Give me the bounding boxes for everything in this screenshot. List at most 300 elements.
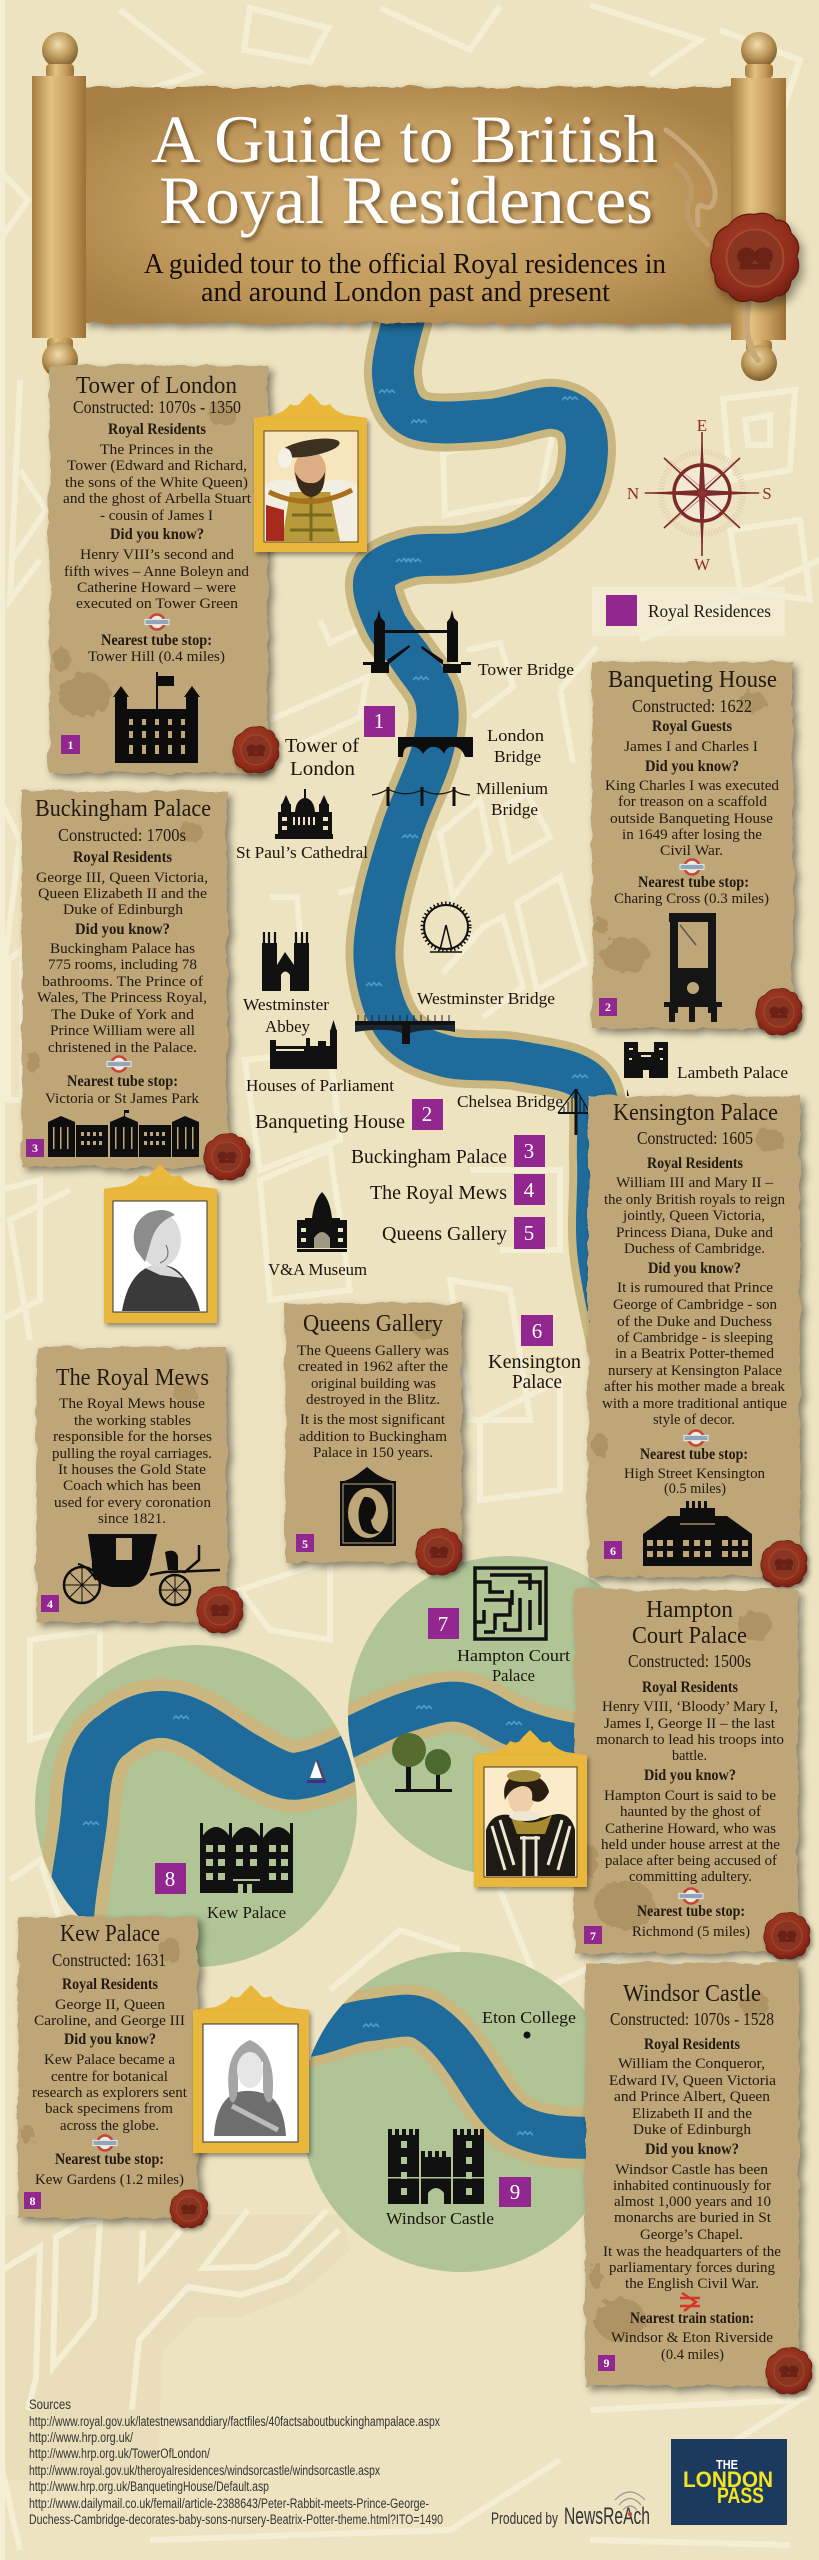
train station: Windsor & Eton Riverside: [611, 2330, 773, 2346]
did you know text: [37, 921, 207, 1056]
sources: http://www.hrp.org.uk/: [29, 2430, 133, 2445]
portrait: tudor queen: [473, 1730, 587, 1887]
stains: [592, 691, 766, 973]
royal residents text: and Prince Albert, Queen: [614, 2089, 771, 2105]
number tag: 9: [604, 2356, 610, 2370]
royal residents text: Edward IV, Queen Victoria: [609, 2073, 776, 2089]
map number tags: 9: [510, 2180, 520, 2204]
did you know text: Buckingham Palace has: [50, 941, 195, 957]
royal residents text: [63, 421, 252, 524]
body text: addition to Buckingham: [299, 1429, 447, 1445]
map labels: Chelsea Bridge: [457, 1092, 563, 1111]
royal residents text: [36, 849, 208, 918]
icon: national rail: [680, 2293, 700, 2311]
construction date: Constructed: 1070s - 1528: [610, 2009, 774, 2029]
tube stop: [632, 1903, 750, 1940]
did you know text: Civil War.: [660, 843, 723, 859]
portrait: henry viii: [253, 393, 367, 552]
royal residents text: and the ghost of Arbella Stuart: [63, 491, 252, 507]
map number tags: 8: [165, 1867, 175, 1891]
tube stop: (0.5 miles): [664, 1481, 726, 1497]
body text: the working stables: [74, 1413, 191, 1429]
heading: Hampton: [646, 1597, 733, 1623]
body text: pulling the royal carriages.: [52, 1446, 212, 1462]
did you know text: palace after being accused of: [605, 1853, 777, 1869]
did you know text: research as explorers sent: [32, 2085, 188, 2101]
stains: [53, 402, 236, 717]
body text: The Royal Mews house: [59, 1396, 205, 1412]
panel: kensington palace: [588, 1096, 807, 1587]
did you know text: executed on Tower Green: [76, 596, 239, 612]
number tag: 5: [302, 1537, 308, 1551]
logo: the london pass: LONDON: [683, 2467, 773, 2492]
map labels: Kensington: [488, 1351, 581, 1373]
compass: S: [762, 484, 772, 503]
map labels: London: [290, 758, 355, 780]
did you know text: christened in the Palace.: [48, 1040, 197, 1056]
body text: destroyed in the Blitz.: [306, 1392, 440, 1408]
did you know text: Catherine Howard – were: [77, 580, 236, 596]
panel: buckingham palace: [22, 791, 250, 1180]
map number tags: 2: [422, 1102, 432, 1126]
did you know text: Did you know?: [75, 921, 170, 938]
number tag: 1: [68, 738, 74, 752]
did you know text: Did you know?: [645, 758, 739, 775]
heading: Kew Palace: [60, 1921, 160, 1947]
tube stop: Victoria or St James Park: [45, 1091, 200, 1107]
legend: Royal Residences: [648, 601, 771, 621]
heading: Banqueting House: [608, 667, 777, 693]
did you know text: in a Beatrix Potter-themed: [615, 1346, 774, 1362]
wax seal: [761, 1540, 807, 1587]
wax seal: [204, 1133, 250, 1180]
map labels: Eton College: [482, 2008, 576, 2027]
icon: lambeth palace: [624, 1042, 668, 1096]
panel: hampton court palace: [575, 1590, 810, 1959]
tube stop: Nearest tube stop:: [638, 874, 749, 891]
tube stop: Kew Gardens (1.2 miles): [35, 2172, 184, 2188]
number tag: [584, 1926, 602, 1944]
panel: banqueting house: [592, 662, 802, 1035]
sources: Duchess-Cambridge-decorates-baby-sons-nursery-Beatrix-Potter-theme.html?ITO=1490: [29, 2512, 443, 2527]
body text: used for every coronation: [54, 1495, 211, 1511]
body text: Coach which has been: [63, 1478, 202, 1494]
did you know text: committing adultery.: [629, 1869, 752, 1885]
map labels: Abbey: [265, 1017, 310, 1036]
icon: houses of parliament: [270, 1020, 337, 1069]
royal residents text: the only British royals to reign: [604, 1192, 785, 1208]
number tag: [26, 1139, 44, 1157]
icon: tube roundel: [679, 1888, 703, 1904]
construction date: Constructed: 1070s - 1350: [73, 397, 241, 417]
map number tags: 1: [374, 709, 384, 733]
icon: westminster bridge: [355, 1015, 455, 1044]
royal residents text: jointly, Queen Victoria,: [622, 1208, 765, 1224]
compass: N: [627, 484, 639, 503]
map labels: London: [487, 726, 545, 745]
tube stop: High Street Kensington: [624, 1466, 765, 1482]
wax seal: [756, 988, 802, 1035]
number tag: [61, 735, 80, 754]
heading: The Royal Mews: [56, 1365, 209, 1391]
body text: since 1821.: [98, 1511, 166, 1527]
did you know text: centre for botanical: [51, 2069, 168, 2085]
panel background: [22, 791, 227, 1167]
did you know text: Catherine Howard, who was: [605, 1821, 776, 1837]
number tag: 4: [47, 1597, 53, 1611]
panel background: [592, 662, 793, 1028]
icon: kensington palace: [643, 1501, 752, 1566]
did you know text: for treason on a scaffold: [618, 794, 767, 810]
royal residents text: Caroline, and George III: [34, 2013, 185, 2029]
royal residents text: the sons of the White Queen): [65, 475, 248, 491]
map number tags: [155, 706, 553, 2207]
map circle: kew: [35, 1645, 365, 1967]
number tag: 7: [590, 1929, 596, 1943]
number tag: [599, 998, 617, 1016]
panel background: [588, 1096, 800, 1577]
tube stop: [614, 874, 769, 907]
sources: http://www.hrp.org.uk/TowerOfLondon/: [29, 2446, 210, 2461]
royal residents text: Royal Residents: [73, 849, 172, 866]
icon: st pauls cathedral: [275, 789, 333, 839]
did you know text: parliamentary forces during: [609, 2260, 775, 2276]
right roller: [731, 32, 786, 381]
map labels: Tower Bridge: [478, 660, 574, 679]
body text: created in 1962 after the: [298, 1359, 448, 1375]
tube stop: Nearest tube stop:: [637, 1903, 745, 1920]
did you know text: Did you know?: [648, 1260, 741, 1277]
royal residents text: Queen Elizabeth II and the: [38, 886, 207, 902]
sources: [29, 2397, 443, 2527]
wax seal: [764, 1912, 810, 1959]
icon: london bridge: [398, 737, 473, 757]
map number tags: 7: [438, 1612, 448, 1636]
sources: Sources: [29, 2397, 71, 2412]
stains: [592, 1128, 784, 1457]
title: A Guide to British: [151, 101, 658, 177]
title: [151, 101, 658, 238]
scroll parchment: [84, 87, 734, 323]
icon: tube roundel: [680, 860, 704, 874]
legend: [592, 587, 785, 636]
construction date: Constructed: 1605: [637, 1128, 753, 1148]
panel: the royal mews: [36, 1348, 243, 1633]
compass: W: [694, 555, 711, 574]
map labels: The Royal Mews: [370, 1182, 507, 1204]
body text: Palace in 150 years.: [313, 1445, 433, 1461]
did you know text: Prince William were all: [50, 1023, 195, 1039]
did you know text: [601, 1767, 780, 1885]
did you know text: of Cambridge - is sleeping: [617, 1330, 773, 1346]
tube stop: Nearest tube stop:: [101, 632, 212, 649]
did you know text: Did you know?: [645, 2141, 739, 2158]
icon: chelsea bridge: [558, 1089, 590, 1135]
icon: trees: [392, 1733, 452, 1792]
did you know text: haunted by the ghost of: [620, 1804, 761, 1820]
tube stop: [624, 1446, 765, 1497]
map labels: St Paul’s Cathedral: [236, 843, 368, 862]
credit: newsreach: [491, 2492, 650, 2530]
panel background: [18, 1917, 198, 2218]
did you know text: Hampton Court is said to be: [604, 1788, 776, 1804]
number tag: [41, 1595, 59, 1612]
did you know text: George’s Chapel.: [640, 2227, 743, 2243]
heading: Tower of London: [76, 373, 237, 399]
did you know text: in 1649 after losing the: [622, 827, 762, 843]
panel background: [285, 1303, 462, 1562]
royal residents text: William the Conqueror,: [618, 2056, 765, 2072]
did you know text: 775 rooms, including 78: [48, 957, 197, 973]
map number tags: 4: [524, 1178, 535, 1202]
royal residents text: Duchess of Cambridge.: [624, 1241, 765, 1257]
map labels: Westminster Bridge: [417, 989, 555, 1008]
royal residents text: Henry VIII, ‘Bloody’ Mary I,: [602, 1699, 778, 1715]
wax seal: [766, 2347, 812, 2394]
heading: Court Palace: [632, 1623, 747, 1649]
royal residents text: monarch to lead his troops into: [596, 1732, 784, 1748]
panel background: [585, 1963, 799, 2386]
did you know text: inhabited continuously for: [613, 2178, 771, 2194]
left roller: [32, 32, 86, 378]
did you know text: outside Banqueting House: [610, 811, 773, 827]
icon: windsor castle: [388, 2129, 484, 2204]
compass: [627, 416, 772, 574]
tube stop: Richmond (5 miles): [632, 1924, 750, 1940]
body text: The Queens Gallery was: [297, 1343, 449, 1359]
body text: [52, 1396, 212, 1527]
map labels: Houses of Parliament: [246, 1076, 394, 1095]
royal guests text: [624, 718, 758, 755]
header scroll: [32, 32, 799, 381]
stains: [27, 822, 203, 1073]
royal residents text: Royal Residents: [108, 421, 206, 438]
panel background: [49, 365, 268, 773]
stains: [173, 1384, 197, 1402]
logo: the london pass: [671, 2439, 787, 2525]
wax seal: [416, 1528, 462, 1575]
body text: It houses the Gold State: [58, 1462, 206, 1478]
panel: tower of london: [49, 365, 279, 773]
portrait: queen victoria: [103, 1164, 217, 1323]
map labels: Windsor Castle: [386, 2209, 494, 2228]
map labels: Lambeth Palace: [677, 1063, 788, 1082]
number tag: 6: [610, 1544, 616, 1558]
stains: [582, 1610, 772, 1930]
royal residents text: [609, 2036, 776, 2138]
map labels: [207, 660, 788, 2228]
icon: sailing boat: [307, 1760, 326, 1783]
tube stop: [35, 2151, 184, 2188]
royal residents text: [34, 1976, 185, 2029]
heading: Windsor Castle: [623, 1981, 761, 2007]
sources: http://www.hrp.org.uk/BanquetingHouse/Default.asp: [29, 2479, 269, 2494]
icon: westminster abbey: [262, 932, 309, 991]
map circle: windsor: [306, 1952, 586, 2272]
title: Royal Residences: [159, 162, 653, 238]
did you know text: nursery at Kensington Palace: [608, 1363, 782, 1379]
royal residents text: [596, 1679, 784, 1764]
did you know text: King Charles I was executed: [605, 778, 779, 794]
stains: [413, 1321, 437, 1339]
did you know text: The Duke of York and: [51, 1007, 195, 1023]
did you know text: Windsor Castle has been: [615, 2162, 769, 2178]
icon: castle: [113, 672, 200, 763]
map labels: Bridge: [494, 747, 541, 766]
icon: palace: [48, 1110, 199, 1157]
map circle: hampton court: [348, 1556, 604, 1872]
wax seal: [233, 726, 279, 773]
did you know text: almost 1,000 years and 10: [614, 2194, 771, 2210]
map labels: Queens Gallery: [382, 1223, 507, 1245]
royal residents text: Royal Residents: [644, 2036, 740, 2053]
did you know text: Wales, The Princess Royal,: [37, 990, 207, 1006]
tube stop: Tower Hill (0.4 miles): [88, 649, 225, 665]
royal residents text: [604, 1155, 785, 1257]
panel: kew palace: [18, 1917, 208, 2228]
number tag: [604, 1541, 622, 1559]
royal guests text: James I and Charles I: [624, 739, 758, 755]
subtitle: and around London past and present: [201, 277, 610, 308]
icon: london eye: [422, 903, 470, 952]
royal residents text: Royal Residents: [62, 1976, 158, 1993]
tube stop: Nearest tube stop:: [55, 2151, 164, 2168]
rope: [666, 130, 758, 360]
royal residents text: Duke of Edinburgh: [63, 902, 184, 918]
royal residents text: The Princes in the: [100, 442, 213, 458]
royal residents text: battle.: [672, 1748, 707, 1764]
map number tags: 3: [524, 1139, 534, 1163]
royal residents text: Elizabeth II and the: [632, 2106, 752, 2122]
did you know text: back specimens from: [45, 2101, 173, 2117]
map labels: Kew Palace: [207, 1903, 286, 1922]
train station: Nearest train station:: [630, 2310, 754, 2327]
compass: E: [697, 416, 707, 435]
icon: millennium bridge: [372, 787, 470, 806]
tube stop: Nearest tube stop:: [67, 1073, 178, 1090]
construction date: Constructed: 1622: [632, 696, 752, 716]
royal residents text: George III, Queen Victoria,: [36, 870, 208, 886]
did you know text: after his mother made a break: [604, 1379, 786, 1395]
did you know text: It was the headquarters of the: [603, 2244, 781, 2260]
icon: kew palace: [200, 1823, 293, 1893]
train station: (0.4 miles): [661, 2347, 724, 2363]
map number tags: 6: [532, 1319, 542, 1343]
body text: [297, 1343, 449, 1461]
panel background: [575, 1590, 798, 1953]
wax seal: [170, 2190, 208, 2228]
did you know text: George of Cambridge - son: [613, 1297, 777, 1313]
wax seal: [197, 1586, 243, 1633]
did you know text: with a more traditional antique: [602, 1396, 787, 1412]
tube stop: Nearest tube stop:: [640, 1446, 748, 1463]
icon: royal carriage: [64, 1534, 220, 1605]
tube stop: [88, 632, 225, 665]
panel: queens gallery: [285, 1303, 462, 1575]
number tag: 3: [32, 1141, 38, 1155]
did you know text: [32, 2031, 188, 2134]
subtitle: A guided tour to the official Royal residences in: [144, 249, 666, 280]
credit: newsreach: Produced by: [491, 2509, 558, 2528]
map labels: Buckingham Palace: [351, 1146, 507, 1168]
did you know text: Did you know?: [644, 1767, 736, 1784]
number tag: 8: [30, 2194, 36, 2208]
icon: tower bridge: [363, 610, 471, 673]
number tag: [296, 1534, 314, 1552]
icon: silhouette frame: [340, 1467, 396, 1546]
royal guests text: Royal Guests: [652, 718, 732, 735]
icon: tube roundel: [107, 1056, 131, 1072]
number tag: [598, 2355, 615, 2371]
royal residents text: William III and Mary II –: [616, 1175, 773, 1191]
sources: http://www.royal.gov.uk/theroyalresidences/windsorcastle/windsorcastle.aspx: [29, 2463, 380, 2478]
did you know text: fifth wives – Anne Boleyn and: [64, 564, 249, 580]
icon: maze: [475, 1568, 546, 1639]
royal residents text: James I, George II – the last: [604, 1716, 776, 1732]
did you know text: It is rumoured that Prince: [617, 1280, 773, 1296]
heading: Queens Gallery: [303, 1311, 443, 1337]
train station: [611, 2310, 773, 2363]
royal residents text: Duke of Edinburgh: [633, 2122, 752, 2138]
heading: [632, 1597, 747, 1649]
icon: tube roundel: [684, 1430, 708, 1446]
logo: the london pass: THE: [716, 2457, 738, 2472]
did you know text: across the globe.: [60, 2118, 159, 2134]
map labels: Banqueting House: [255, 1111, 405, 1133]
sources: http://www.dailymail.co.uk/femail/article-2388643/Peter-Rabbit-meets-Prince-George-: [29, 2496, 429, 2511]
did you know text: [603, 2141, 781, 2292]
stains: [590, 1992, 770, 2342]
royal residents text: Princess Diana, Duke and: [616, 1225, 773, 1241]
number tag: [24, 2192, 41, 2209]
river thames: [366, 310, 615, 1340]
sources: http://www.royal.gov.uk/latestnewsanddiary/factfiles/40factsaboutbuckinghampalace.aspx: [29, 2414, 440, 2429]
did you know text: [605, 758, 779, 859]
construction date: Constructed: 1500s: [628, 1651, 751, 1671]
heading: Buckingham Palace: [35, 796, 211, 822]
portrait: george ii: [193, 1985, 309, 2153]
tube stop: Charing Cross (0.3 miles): [614, 891, 769, 907]
royal residents text: George II, Queen: [55, 1997, 166, 2013]
body text: It is the most significant: [300, 1412, 446, 1428]
map labels: Palace: [512, 1371, 562, 1393]
did you know text: Henry VIII’s second and: [80, 547, 235, 563]
map labels: Palace: [492, 1666, 535, 1685]
tube stop: [45, 1073, 200, 1107]
royal residents text: Tower (Edward and Richard,: [67, 458, 247, 474]
map labels: Millenium: [476, 779, 548, 798]
body text: responsible for the horses: [53, 1429, 212, 1445]
number tag: 2: [605, 1000, 611, 1014]
logo: the london pass: PASS: [717, 2483, 764, 2508]
royal residents text: Royal Residents: [642, 1679, 738, 1696]
did you know text: [64, 526, 249, 612]
panel background: [36, 1348, 227, 1622]
subtitle: [144, 249, 666, 308]
did you know text: Kew Palace became a: [44, 2052, 175, 2068]
did you know text: held under house arrest at the: [601, 1837, 780, 1853]
map labels: Bridge: [491, 800, 538, 819]
map labels: Hampton Court: [457, 1646, 570, 1665]
did you know text: [602, 1260, 787, 1428]
did you know text: the English Civil War.: [625, 2276, 759, 2292]
map labels: Westminster: [243, 995, 329, 1014]
marker: eton college dot: [524, 2032, 530, 2038]
icon: guillotine: [664, 913, 722, 1022]
did you know text: of the Duke and Duchess: [617, 1314, 772, 1330]
did you know text: Did you know?: [64, 2031, 156, 2048]
map labels: V&A Museum: [268, 1260, 367, 1279]
